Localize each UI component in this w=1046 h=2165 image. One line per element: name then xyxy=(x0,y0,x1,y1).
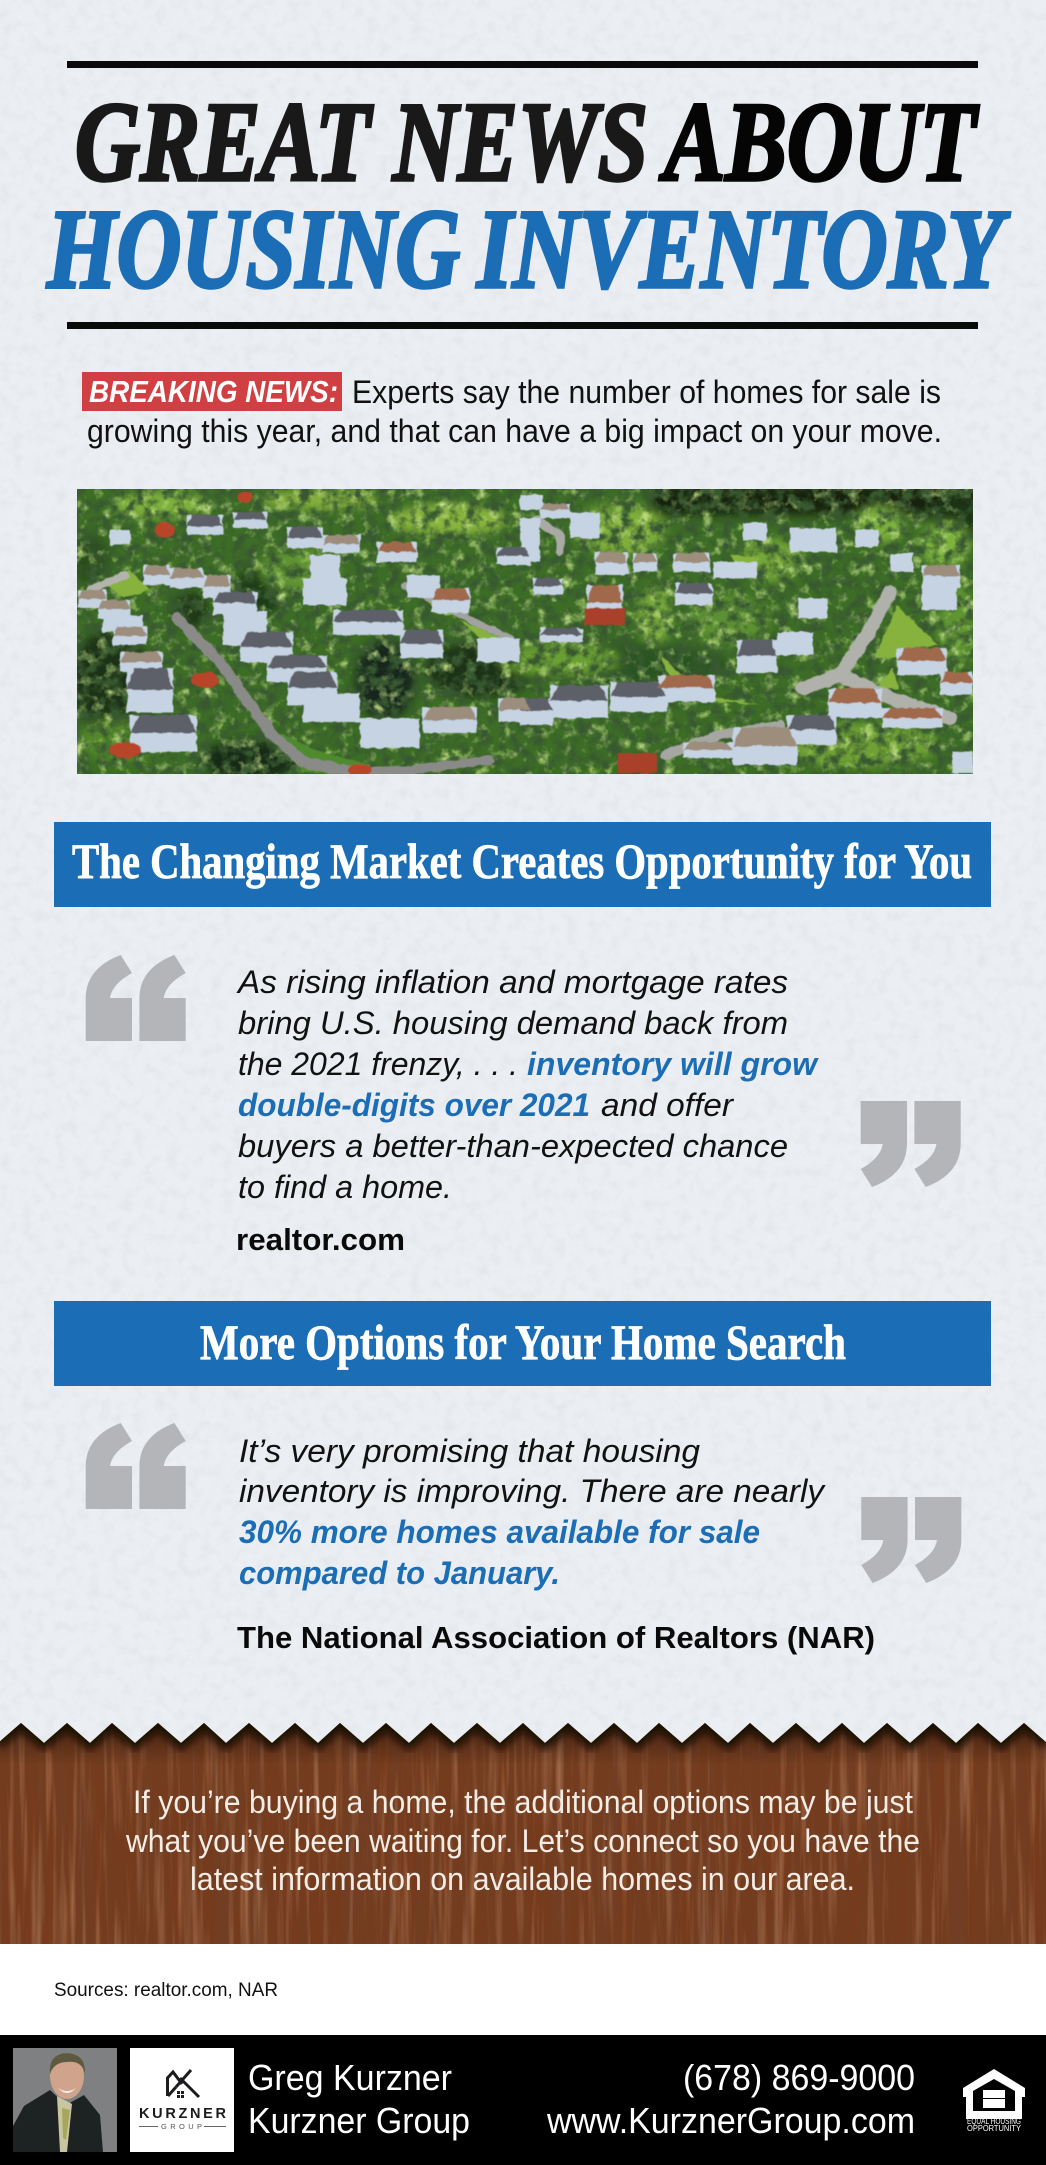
quote text: compared to January. xyxy=(239,1555,560,1591)
panel: footer contact bar xyxy=(0,2035,1046,2165)
quote text: 30% more homes available for sale xyxy=(239,1514,760,1550)
quote text: buyers a better-than-expected chance xyxy=(238,1128,788,1164)
call to action text xyxy=(125,1784,920,1897)
quote text: and offer xyxy=(601,1087,734,1123)
logo: Kurzner Group: GROUP xyxy=(161,2122,202,2131)
deck and red roofs xyxy=(585,608,657,773)
logo: Kurzner Group xyxy=(130,2048,234,2152)
quote text: bring U.S. housing demand back from xyxy=(238,1005,788,1041)
intro text block: Experts say the number of homes for sale is xyxy=(352,374,941,410)
intro text block xyxy=(82,372,942,449)
heading banner: changing market xyxy=(54,822,991,907)
panel: wood call to action xyxy=(0,1715,1046,1945)
title: GREAT NEWS xyxy=(75,80,648,205)
quote text: inventory is improving. There are nearly xyxy=(239,1473,826,1509)
phone and website xyxy=(546,2057,915,2141)
quote text: to find a home. xyxy=(238,1169,452,1205)
dark roofs xyxy=(127,512,837,733)
icon: equal housing opportunity: OPPORTUNITY xyxy=(967,2124,1022,2133)
title xyxy=(46,80,1010,312)
agent portrait xyxy=(13,2048,117,2152)
brown roofs xyxy=(377,542,973,718)
call to action text: If you’re buying a home, the additional options may be just xyxy=(133,1784,913,1820)
quote text xyxy=(239,1433,826,1591)
agent name and company xyxy=(248,2057,470,2141)
neighborhood ground, roads and houses xyxy=(78,492,973,776)
title: ABOUT xyxy=(659,80,979,205)
bottom title rule xyxy=(67,322,978,329)
top title rule xyxy=(67,61,978,68)
icon: close quotation mark xyxy=(861,1497,961,1583)
icon: close quotation mark xyxy=(861,1101,961,1187)
icon: equal housing opportunity xyxy=(963,2069,1025,2133)
heading banner: more options xyxy=(54,1301,991,1386)
quote text: It’s very promising that housing xyxy=(239,1433,700,1469)
icon: open quotation mark xyxy=(86,955,186,1041)
heading banner: more options: More Options for Your Home Search xyxy=(200,1314,846,1370)
roads xyxy=(90,520,950,772)
agent name and company: Kurzner Group xyxy=(248,2100,470,2141)
red trees xyxy=(109,492,372,776)
agent name and company: Greg Kurzner xyxy=(248,2057,452,2098)
icon: equal housing opportunity: EQUAL HOUSING xyxy=(967,2117,1021,2126)
house walls xyxy=(78,495,973,773)
intro text block: growing this year, and that can have a big impact on your move. xyxy=(87,413,942,449)
phone and website: (678) 869-9000 xyxy=(683,2057,915,2098)
white sources strip xyxy=(0,1944,1046,2035)
sources: Sources: realtor.com, NAR xyxy=(54,1979,278,2001)
quote text: As rising inflation and mortgage rates xyxy=(236,964,788,1000)
call to action text: what you’ve been waiting for. Let’s connect so you have the xyxy=(125,1823,920,1859)
phone and website: www.KurznerGroup.com xyxy=(546,2100,915,2141)
logo: Kurzner Group: KURZNER xyxy=(139,2106,227,2122)
quote text xyxy=(236,964,819,1205)
quote panel: realtor.com xyxy=(86,955,961,1257)
tan roofs xyxy=(78,503,960,750)
call to action text: latest information on available homes in our area. xyxy=(190,1861,855,1897)
photo: aerial view of neighborhood xyxy=(70,485,980,780)
breaking news tag: BREAKING NEWS: xyxy=(89,374,338,409)
attribution: realtor.com xyxy=(236,1222,405,1257)
title: HOUSING xyxy=(46,187,460,312)
icon: roof K mark xyxy=(168,2070,199,2097)
icon: open quotation mark xyxy=(86,1423,186,1509)
quote text: the 2021 frenzy, . . . xyxy=(238,1046,518,1082)
quote text: inventory will grow xyxy=(527,1046,819,1082)
lawns xyxy=(105,555,937,776)
quote text: double-digits over 2021 xyxy=(238,1087,590,1123)
quote panel: NAR xyxy=(86,1423,961,1655)
attribution: The National Association of Realtors (NAR) xyxy=(237,1620,875,1655)
